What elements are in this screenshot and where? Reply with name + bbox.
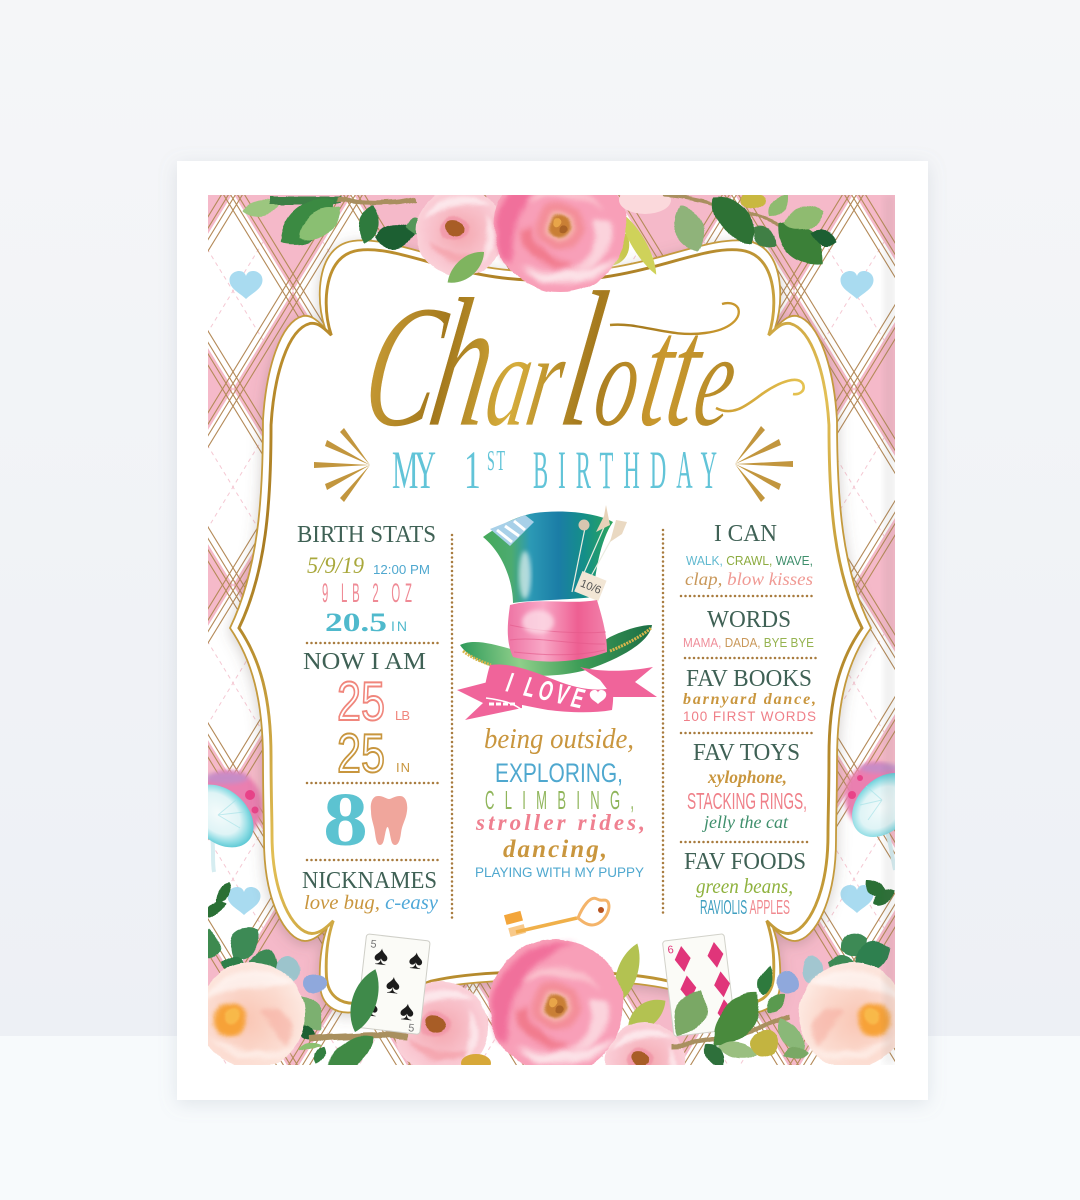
subtitle: My 1st Birthday <box>392 440 717 500</box>
print edge shadow <box>884 195 895 1065</box>
mushroom left <box>208 767 262 872</box>
leaf over five of spades <box>350 969 379 1032</box>
dotted dividers <box>307 530 816 918</box>
playing card: five of spades: 5 <box>370 938 377 951</box>
hat brim <box>460 625 652 676</box>
stroller rides: stroller rides, <box>475 810 645 835</box>
fav books line one: barnyard dance, <box>683 691 816 708</box>
top-left foliage <box>242 196 418 250</box>
exploring: EXPLORING, <box>495 758 623 788</box>
birth weight: 9 LB 2 OZ <box>322 579 412 609</box>
I love banner <box>457 664 657 720</box>
current weight: 25 <box>337 670 385 732</box>
olive leaves top right of rose <box>613 216 656 275</box>
fav toys line two: STACKING RINGS, <box>687 788 807 814</box>
playing card: five of spades: ♠ <box>363 991 380 1023</box>
fav toys heading: FAV TOYS <box>693 740 800 766</box>
dancing: dancing, <box>503 836 607 863</box>
I love banner: I LOVE <box>504 666 588 715</box>
hat tag: 10/6 <box>578 578 603 597</box>
title: Charlotte: t <box>629 284 690 461</box>
leaf under top rose <box>448 252 484 283</box>
picture frame <box>177 161 928 1100</box>
playing card: five of spades: ♠ <box>384 968 402 1000</box>
playing with my puppy: PLAYING WITH MY PUPPY <box>475 864 645 880</box>
centre column: hat <box>460 505 652 676</box>
birth date and time: 5/9/19 <box>307 553 364 578</box>
birth date and time <box>307 553 430 578</box>
title: Charlotte: h <box>418 260 511 465</box>
blue heart bottom left <box>228 887 260 915</box>
words list: MAMA, DADA, BYE BYE <box>683 636 814 650</box>
top small rose <box>416 195 499 276</box>
pale rose behind top right <box>619 195 671 214</box>
right column <box>683 521 816 919</box>
fav toys line three: jelly the cat <box>702 812 789 832</box>
playing card: five of spades <box>356 934 430 1035</box>
birth stats heading: BIRTH STATS <box>297 522 436 548</box>
bottom-right peony <box>798 962 895 1065</box>
bottom middle-left rose <box>396 981 488 1065</box>
blue heart top right <box>840 271 874 299</box>
blue heart bottom right <box>840 885 874 913</box>
playing card: five of spades: 5 <box>408 1022 415 1035</box>
words heading: WORDS <box>707 607 791 633</box>
climbing: CLIMBING, <box>485 786 634 815</box>
playing card: six of diamonds <box>662 934 736 1037</box>
title: Charlotte: a <box>477 305 545 455</box>
fav toys line one: xylophone, <box>707 767 787 787</box>
i can list line two: clap, blow kisses <box>685 569 813 589</box>
current weight: LB <box>395 708 410 723</box>
playing card: six of diamonds: 6 <box>667 944 674 957</box>
print artwork <box>208 195 895 1065</box>
title: Charlotte: o <box>585 305 653 455</box>
current height: 25 <box>337 722 385 784</box>
fav foods heading: FAV FOODS <box>684 849 806 875</box>
top-right foliage <box>662 195 836 265</box>
icon: key <box>504 898 609 937</box>
centre column: list <box>475 724 645 880</box>
blue heart top left <box>230 271 262 299</box>
bottom-right foliage <box>665 876 897 1072</box>
bottom-left peony <box>208 962 306 1065</box>
fav foods line two: RAVIOLIS APPLES <box>700 897 790 919</box>
i can list line one: WALK, CRAWL, WAVE, <box>686 554 813 568</box>
title: Charlotte <box>350 253 804 468</box>
playing card: five of spades: ♠ <box>372 940 390 971</box>
hat pins <box>572 505 627 592</box>
sunburst left <box>314 428 370 502</box>
hat tag <box>574 571 607 601</box>
teeth count: 8 <box>323 778 368 862</box>
olive leaves bottom centre <box>616 944 666 1026</box>
floor <box>0 1036 1080 1200</box>
argyle pattern background <box>208 195 899 1065</box>
birth length <box>325 608 407 637</box>
current height: IN <box>396 760 410 775</box>
subtitle: My 1st Birthday: BIRTHDAY <box>533 440 717 500</box>
playing card: five of spades: ♠ <box>407 944 425 975</box>
title: Charlotte: t <box>656 284 717 461</box>
hat patch <box>490 515 534 546</box>
bottom-left foliage <box>208 882 327 1064</box>
bottom pale rose <box>604 1022 686 1065</box>
nicknames heading: NICKNAMES <box>302 868 437 894</box>
nicknames text: love bug, c-easy <box>304 892 438 914</box>
fav books line two: 100 FIRST WORDS <box>683 709 816 724</box>
sunburst right <box>735 426 793 502</box>
title: Charlotte: r <box>517 305 577 455</box>
hat band <box>508 600 607 662</box>
title: Charlotte: C <box>351 269 459 463</box>
now i am heading: NOW I AM <box>303 649 426 675</box>
mushroom right <box>842 760 895 870</box>
title t-bar swash <box>610 303 739 334</box>
icon: tooth <box>371 796 407 845</box>
top big pink rose <box>492 195 627 292</box>
birth date and time: 12:00 PM <box>373 563 430 577</box>
title: Charlotte: l <box>548 253 620 468</box>
i can heading: I CAN <box>714 521 777 547</box>
birth length: 20.5 <box>325 608 387 637</box>
plaque with gold border <box>230 240 871 1013</box>
bud <box>461 1054 491 1065</box>
playing card: five of spades: ♠ <box>398 995 416 1027</box>
being outside: being outside, <box>484 724 634 755</box>
title: Charlotte: e <box>684 305 748 455</box>
subtitle: My 1st Birthday: ST <box>487 445 505 476</box>
birth length: IN <box>391 618 407 634</box>
fav foods line one: green beans, <box>696 874 793 898</box>
subtitle: My 1st Birthday: MY <box>392 441 436 500</box>
bottom big pink rose <box>489 939 623 1073</box>
left column <box>297 522 438 914</box>
subtitle: My 1st Birthday: 1 <box>464 440 481 500</box>
fav books heading: FAV BOOKS <box>686 666 812 692</box>
hat crown <box>483 512 613 603</box>
title tail swash <box>716 380 804 411</box>
branch bottom left <box>308 1031 408 1065</box>
